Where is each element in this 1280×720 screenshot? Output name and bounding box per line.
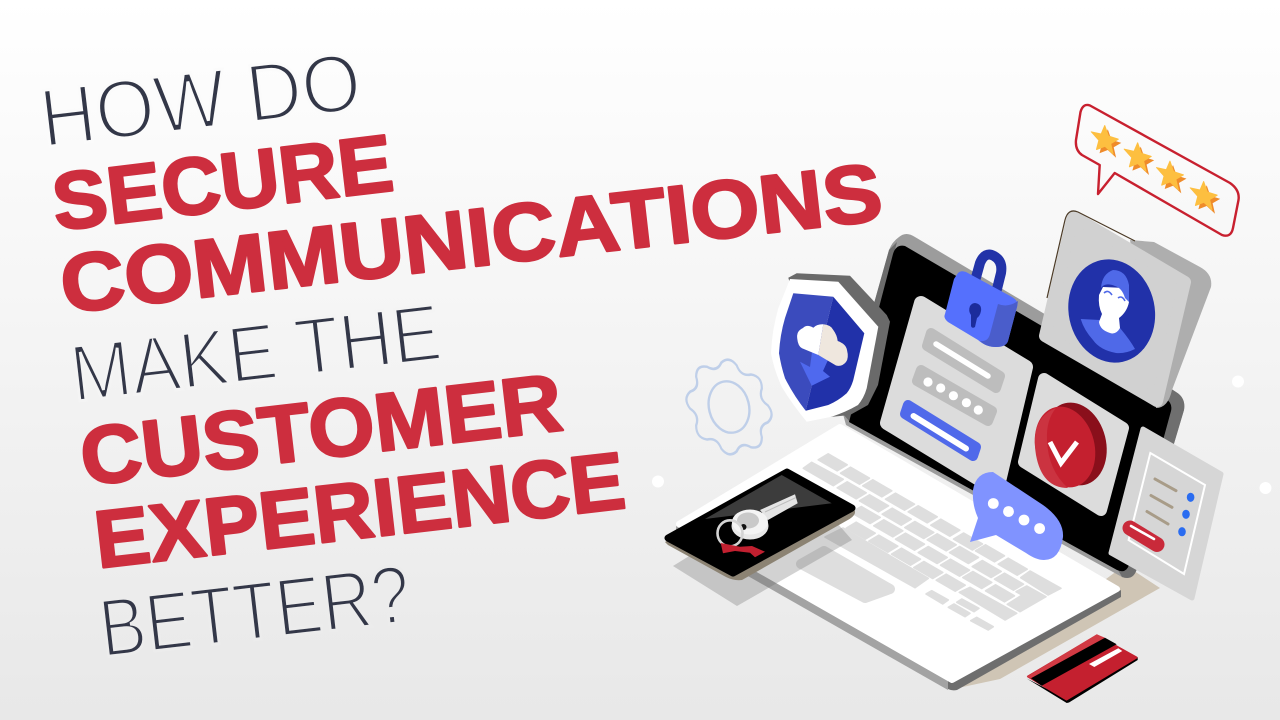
screen frame dark right side [1118, 384, 1184, 578]
rating speech bubble [1076, 105, 1239, 236]
icon: check mark [1050, 442, 1077, 463]
document inner page [1129, 453, 1205, 574]
profile card front [1045, 216, 1185, 401]
bubble shape [970, 472, 1063, 560]
icon: gear outline [686, 352, 772, 462]
avatar eyes [1104, 291, 1125, 301]
panel: document card [1111, 429, 1221, 598]
phone glare [705, 475, 832, 519]
avatar face [1099, 287, 1129, 333]
shield arrow [800, 352, 830, 386]
title line: secure: SECURE [47, 119, 398, 248]
username field [927, 333, 1000, 388]
panel: login card [887, 303, 1026, 490]
login button [905, 405, 976, 456]
document red button line [1131, 526, 1154, 539]
padlock keyhole [969, 303, 981, 328]
password field [917, 370, 992, 421]
laptop base left edge [676, 526, 948, 690]
phone shadow [673, 500, 852, 606]
title line: how do: HOW DO [35, 36, 366, 165]
password dots [923, 377, 983, 415]
laptop base front edge [948, 590, 1121, 690]
padlock shackle [975, 255, 1001, 293]
rating stars [1091, 122, 1220, 215]
red coin face [1026, 400, 1104, 494]
key blade groove [765, 498, 796, 512]
title line: better?: BETTER? [95, 549, 415, 675]
profile card dark edge [1047, 211, 1135, 298]
card black stripe [1031, 638, 1117, 686]
icon: speech bubble with password [970, 472, 1063, 560]
key ribbon [721, 543, 765, 557]
title line: communications: COMMUNICATIONS [56, 147, 887, 331]
title [35, 36, 887, 675]
laptop [676, 234, 1184, 690]
profile card back [1130, 240, 1211, 408]
login button line [914, 416, 966, 448]
decorative white dots [652, 376, 1272, 494]
cloud white half [797, 324, 823, 355]
document red button [1130, 528, 1157, 544]
padlock body [944, 271, 1017, 347]
check card body [1024, 379, 1123, 510]
card body [1028, 636, 1136, 700]
icon: shield [771, 273, 890, 422]
document text lines [1147, 479, 1176, 524]
key blade [760, 494, 798, 520]
phone body [668, 472, 852, 573]
document card body [1111, 429, 1221, 598]
laptop base top [679, 427, 1117, 680]
login card body [887, 303, 1026, 490]
bubble password dots [988, 498, 1045, 534]
title line: customer: CUSTOMER [76, 357, 567, 503]
keyboard [803, 454, 1061, 630]
shield blue right [806, 297, 864, 411]
icon: phone with key [665, 472, 855, 580]
panel: check card [1024, 379, 1123, 510]
avatar hair [1101, 270, 1129, 302]
red coin side [1035, 396, 1115, 492]
icon: padlock [944, 255, 1018, 347]
icon: credit card [1027, 634, 1138, 703]
profile avatar circle [1059, 251, 1165, 371]
screen black display [849, 246, 1171, 571]
key ring [718, 520, 742, 546]
title line: make the: MAKE THE [66, 287, 445, 418]
screen frame dark left side [843, 242, 897, 422]
cloud beige half [818, 324, 848, 366]
shield white border [771, 279, 878, 422]
rating bubble outline [1076, 105, 1239, 236]
card bottom edge [1027, 657, 1138, 703]
shield blue left [779, 293, 833, 411]
laptop ground shadow [958, 565, 1160, 688]
laptop screen frame [843, 234, 1184, 578]
avatar shoulders [1081, 319, 1135, 353]
trackpad [801, 551, 890, 598]
phone edge [665, 473, 855, 580]
title line: experience: EXPERIENCE [90, 436, 630, 586]
shield extrusion [788, 273, 890, 417]
username line [936, 344, 988, 376]
card white stripe [1089, 648, 1122, 667]
document blue dots [1178, 493, 1194, 536]
key head [732, 510, 768, 540]
padlock side [980, 301, 1018, 347]
card top highlight [1027, 634, 1105, 678]
panel: profile card [1045, 211, 1211, 408]
red coin highlight [1035, 408, 1068, 488]
